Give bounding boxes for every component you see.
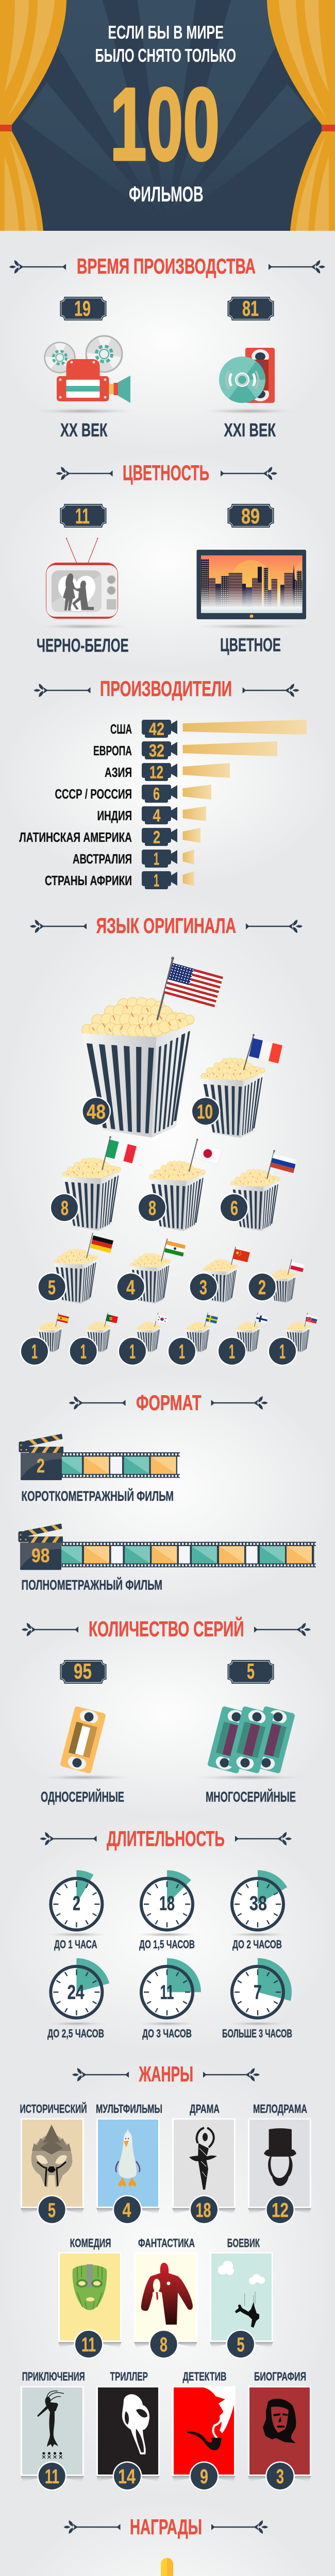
popcorn: Russian 6: 6 [230, 1197, 238, 1219]
popcorn: Slovak 1 [268, 1313, 317, 1366]
popcorn: Italian 8 [49, 1136, 137, 1231]
plaque: 95: 95 [74, 1659, 92, 1683]
section: duration [40, 1826, 292, 2040]
curtain: right [267, 0, 335, 231]
section: format [19, 1391, 316, 1593]
label: colour: ЦВЕТНОЕ [220, 634, 281, 655]
heading: ФОРМАТ [136, 1391, 202, 1415]
genre card: animation 4: 4 [123, 2199, 131, 2222]
icon: disc and cassette [219, 348, 275, 403]
clock: up to 2.5 hours, 24: 24 [67, 1981, 85, 2004]
heading [56, 461, 277, 485]
bar: India 4: ИНДИЯ [97, 808, 132, 823]
popcorn: Korean 1 [118, 1313, 168, 1366]
plaque: 11 [60, 504, 106, 528]
popcorn: Russian 6 [220, 1150, 297, 1231]
genre card: adventure 11: ПРИКЛЮЧЕНИЯ [22, 2370, 85, 2383]
label: XXI century: XXI ВЕК [224, 419, 276, 440]
heading: НАГРАДЫ [130, 2515, 202, 2539]
clock: up to 3 hours, 11: ДО 3 ЧАСОВ [142, 2027, 192, 2040]
heading: ВРЕМЯ ПРОИЗВОДСТВА [77, 254, 256, 278]
genre card: thriller 14: ТРИЛЛЕР [110, 2370, 148, 2383]
clock: up to 1 hour, 2: ДО 1 ЧАСА [54, 1938, 97, 1951]
shadows [37, 623, 308, 630]
bar: Asia 12: АЗИЯ [105, 765, 132, 780]
genre card: action 5: 5 [237, 2334, 244, 2356]
bar: Asia 12: 12 [149, 763, 163, 783]
genre card: animation 4: МУЛЬТФИЛЬМЫ [96, 2102, 162, 2115]
film strip: feature film 98 [19, 1523, 316, 1570]
icon: colour monitor with skyline [197, 550, 306, 619]
section: number of episodes [22, 1616, 311, 1805]
icon: single cassette [60, 1706, 106, 1774]
shadows [32, 408, 296, 414]
bar: Europe 32: ЕВРОПА [93, 743, 132, 758]
plaque: 81 [228, 296, 274, 320]
bar: Latin America 2 [19, 828, 200, 848]
plaque: 81: 81 [242, 296, 259, 320]
clock: up to 2 hours, 38: ДО 2 ЧАСОВ [232, 1938, 282, 1951]
plaque: 89 [228, 504, 274, 528]
section: genres [20, 2062, 311, 2490]
popcorn: German 5 [37, 1233, 113, 1304]
popcorn: Portuguese 1: 1 [80, 1341, 87, 1363]
popcorn: French 10: 10 [197, 1101, 213, 1123]
genre card: animation 4 [96, 2102, 162, 2225]
popcorn: Slovak 1: 1 [279, 1341, 286, 1363]
genre card: melodrama 12: 12 [272, 2199, 289, 2222]
bar: African countries 1: 1 [154, 871, 159, 891]
plaque: 11: 11 [75, 504, 90, 528]
bar: Australia 1: 1 [154, 850, 159, 869]
genre card: action 5 [210, 2236, 273, 2359]
section: original language [20, 913, 317, 1366]
clock: up to 3 hours, 11: 11 [160, 1981, 174, 2004]
popcorn: Japanese 8: 8 [148, 1197, 156, 1219]
genre card: sci-fi 8: 8 [160, 2334, 167, 2356]
popcorn: English 48: 48 [87, 1101, 106, 1123]
clock: up to 2 hours, 38: 38 [249, 1893, 267, 1915]
bar: Europe 32 [93, 741, 277, 761]
bar: USA 42: США [110, 721, 132, 737]
genre card: drama 18: 18 [196, 2199, 211, 2222]
clock: over 3 hours, 7: БОЛЬШЕ 3 ЧАСОВ [222, 2027, 292, 2040]
plaque: 19 [60, 296, 106, 320]
label: single episode: ОДНОСЕРИЙНЫЕ [41, 1788, 124, 1805]
bar: India 4 [97, 806, 206, 826]
plaque: 95 [60, 1659, 106, 1684]
icon: three cassettes [207, 1706, 295, 1774]
genre card: sci-fi 8: ФАНТАСТИКА [138, 2236, 195, 2250]
genre card: thriller 14: 14 [118, 2466, 136, 2488]
plaque: 5 [228, 1659, 274, 1684]
shadows [39, 1774, 307, 1781]
clock: up to 1 hour, 2 [46, 1870, 106, 1951]
heading [72, 2062, 260, 2086]
bar: Latin America 2: ЛАТИНСКАЯ АМЕРИКА [19, 829, 132, 845]
clock: up to 2.5 hours, 24: ДО 2,5 ЧАСОВ [47, 2027, 104, 2040]
heading: ЯЗЫК ОРИГИНАЛА [96, 913, 236, 938]
genre card: biography 3: БИОГРАФИЯ [254, 2370, 306, 2383]
film strip: short film 2: 2 [37, 1455, 45, 1477]
icon: black and white TV [46, 538, 118, 619]
bar: Asia 12 [105, 763, 230, 783]
popcorn: Swedish 1: 1 [179, 1341, 185, 1363]
film strip: short film 2 [19, 1434, 180, 1480]
popcorn: English 48 [81, 957, 223, 1138]
popcorn: Polish 2 [247, 1259, 305, 1303]
plaque: 5: 5 [247, 1659, 255, 1683]
heading [64, 2515, 268, 2539]
genre card: comedy 11 [58, 2236, 122, 2359]
film strip: feature film 98: 98 [31, 1545, 50, 1567]
clock: up to 2.5 hours, 24 [46, 1958, 109, 2040]
title line 3: ФИЛЬМОВ [129, 182, 204, 206]
bar: Latin America 2: 2 [153, 828, 160, 848]
popcorn: Japanese 8 [137, 1139, 222, 1231]
section: awards [64, 2519, 268, 2576]
popcorn: Polish 2: 2 [258, 1277, 266, 1299]
popcorn: Finnish 1: 1 [229, 1341, 235, 1363]
clock: up to 1.5 hours, 18: 18 [159, 1893, 175, 1915]
clock: over 3 hours, 7: 7 [254, 1981, 262, 2004]
genre card: sci-fi 8 [134, 2236, 197, 2359]
genre card: detective 9: ДЕТЕКТИВ [182, 2370, 227, 2383]
genre card: thriller 14 [96, 2370, 160, 2490]
genre card: historical 5: 5 [48, 2199, 56, 2222]
genre card: melodrama 12: МЕЛОДРАМА [253, 2102, 307, 2115]
heading [69, 1391, 268, 1415]
genre card: action 5: БОЕВИК [227, 2236, 260, 2250]
big number 100: 100 [110, 67, 220, 182]
curtain: left [0, 0, 66, 231]
genre card: comedy 11: КОМЕДИЯ [70, 2236, 111, 2250]
popcorn: Finnish 1 [217, 1313, 268, 1366]
genre card: adventure 11 [21, 2370, 85, 2490]
label: short film: КОРОТКОМЕТРАЖНЫЙ ФИЛЬМ [22, 1488, 174, 1504]
heading: ЦВЕТНОСТЬ [123, 461, 209, 485]
icon: film projector [45, 336, 130, 403]
genre card: adventure 11: 11 [45, 2466, 59, 2488]
bar: USA 42: 42 [149, 720, 164, 739]
clock: up to 1.5 hours, 18: ДО 1,5 ЧАСОВ [139, 1938, 195, 1951]
section: colour [37, 461, 308, 656]
label: XX century: XX ВЕК [60, 419, 108, 440]
label: black and white: ЧЕРНО-БЕЛОЕ [37, 635, 129, 656]
section: producers [19, 676, 307, 891]
title line 2: БЫЛО СНЯТО ТОЛЬКО [95, 45, 236, 66]
clock: over 3 hours, 7 [222, 1958, 292, 2040]
heading: ПРОИЗВОДИТЕЛИ [100, 676, 232, 701]
popcorn: Portuguese 1 [69, 1313, 118, 1366]
genre card: detective 9 [172, 2370, 236, 2490]
clock: up to 1 hour, 2: 2 [73, 1893, 80, 1915]
popcorn: Swedish 1 [167, 1313, 218, 1366]
genre card: melodrama 12 [248, 2102, 311, 2225]
popcorn: Hindi 4 [116, 1239, 186, 1304]
heading: КОЛИЧЕСТВО СЕРИЙ [89, 1616, 244, 1641]
clock: up to 3 hours, 11 [137, 1958, 201, 2040]
plaque: 89: 89 [241, 504, 260, 528]
genre card: comedy 11: 11 [81, 2334, 96, 2356]
popcorn: Chinese 3: 3 [199, 1277, 207, 1299]
bar: India 4: 4 [153, 806, 161, 826]
bar: USSR/Russia 6: 6 [153, 785, 160, 804]
bar: African countries 1 [45, 871, 194, 891]
clock: up to 2 hours, 38 [228, 1870, 288, 1951]
genre card: detective 9: 9 [200, 2466, 208, 2488]
popcorn: German 5: 5 [48, 1277, 56, 1299]
popcorn: Chinese 3 [189, 1247, 250, 1303]
genre card: drama 18 [172, 2102, 236, 2225]
genre card: biography 3: 3 [276, 2466, 284, 2488]
plaque: 19: 19 [74, 296, 91, 320]
genre card: historical 5 [20, 2102, 87, 2225]
bar: African countries 1: СТРАНЫ АФРИКИ [45, 873, 132, 888]
popcorn: Italian 8: 8 [61, 1197, 69, 1219]
bar: Australia 1 [73, 850, 194, 869]
icon: statuette [161, 2558, 173, 2576]
label: feature film: ПОЛНОМЕТРАЖНЫЙ ФИЛЬМ [22, 1577, 162, 1593]
title line 1: ЕСЛИ БЫ В МИРЕ [108, 22, 224, 43]
popcorn: Hindi 4: 4 [126, 1277, 135, 1299]
bar: Europe 32: 32 [149, 741, 164, 761]
bar: USSR/Russia 6: СССР / РОССИЯ [55, 786, 132, 802]
popcorn: Korean 1: 1 [129, 1341, 136, 1363]
section: production time [9, 254, 325, 440]
heading: ЖАНРЫ [139, 2062, 193, 2086]
clock: up to 1.5 hours, 18 [137, 1870, 197, 1951]
bar: USSR/Russia 6 [55, 785, 211, 804]
genre card: biography 3 [248, 2370, 311, 2490]
bar: USA 42 [110, 720, 307, 739]
heading: ДЛИТЕЛЬНОСТЬ [107, 1826, 225, 1851]
genre card: drama 18: ДРАМА [190, 2102, 220, 2115]
genre card: historical 5: ИСТОРИЧЕСКИЙ [20, 2102, 87, 2115]
bar: Australia 1: АВСТРАЛИЯ [73, 851, 132, 867]
popcorn: Spanish 1: 1 [31, 1341, 38, 1363]
popcorn: Spanish 1 [20, 1313, 69, 1366]
popcorn: French 10 [191, 1034, 282, 1138]
hero banner [0, 0, 335, 231]
